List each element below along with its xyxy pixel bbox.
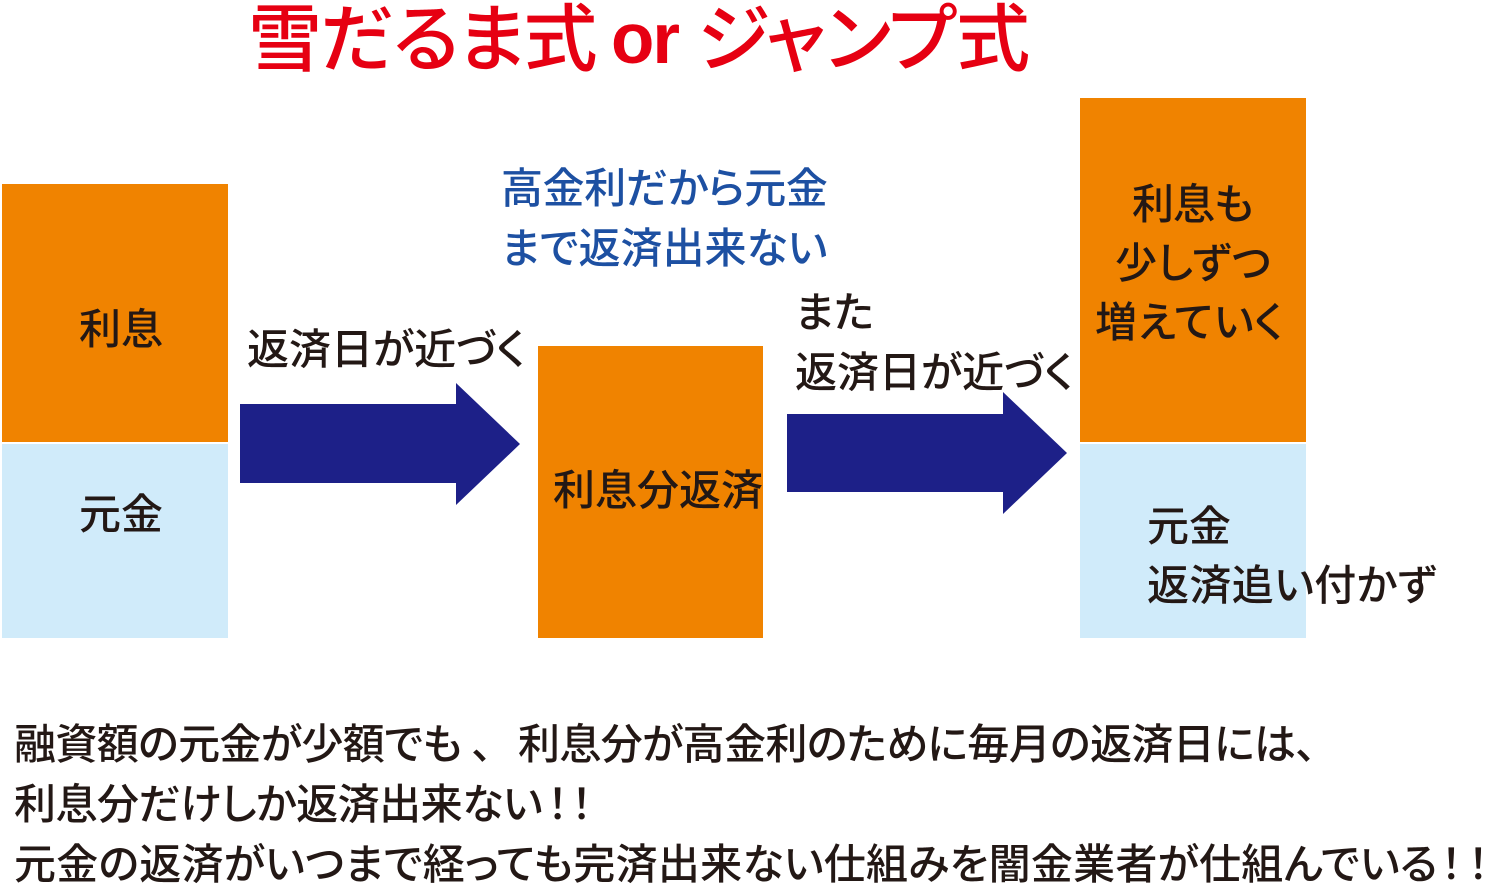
right principal label: 元金 [1147,503,1231,550]
explanation text: 元金の返済がいつまで経っても完済出来ない仕組みを闇金業者が仕組んでいる！！ [14,841,1495,888]
blue note [501,165,827,272]
right interest label: 少しずつ [1115,240,1271,287]
arrow: first [240,383,520,505]
second arrow label [795,289,1074,396]
right principal label: 返済追い付かず [1147,562,1437,609]
right principal label [1147,503,1437,609]
left principal block [2,444,228,638]
second arrow label: 返済日が近づく [795,349,1074,396]
first arrow label: 返済日が近づく [247,326,526,373]
arrow: second [787,392,1067,514]
middle interest block [538,346,763,638]
right interest label: 増えていく [1095,299,1284,346]
left principal label: 元金 [79,491,163,538]
right principal block [1080,444,1306,638]
explanation text: 利息分だけしか返済出来ない！！ [14,781,595,828]
explanation text [14,721,1495,888]
right interest label [1095,181,1284,346]
left interest block [2,184,228,442]
right interest block [1080,98,1306,442]
blue note: まで返済出来ない [501,225,827,272]
title: 雪だるま式 [248,0,596,81]
right interest label: 利息も [1132,181,1253,228]
middle label: 利息分返済 [553,467,763,514]
title [248,0,1030,81]
explanation text: 融資額の元金が少額でも、 利息分が高金利のために毎月の返済日には、 [14,721,1316,768]
title: or [611,0,678,79]
left interest label: 利息 [79,306,163,353]
blue note: 高金利だから元金 [501,165,827,212]
second arrow label: また [795,289,874,336]
title: ジャンプ式 [697,0,1030,81]
